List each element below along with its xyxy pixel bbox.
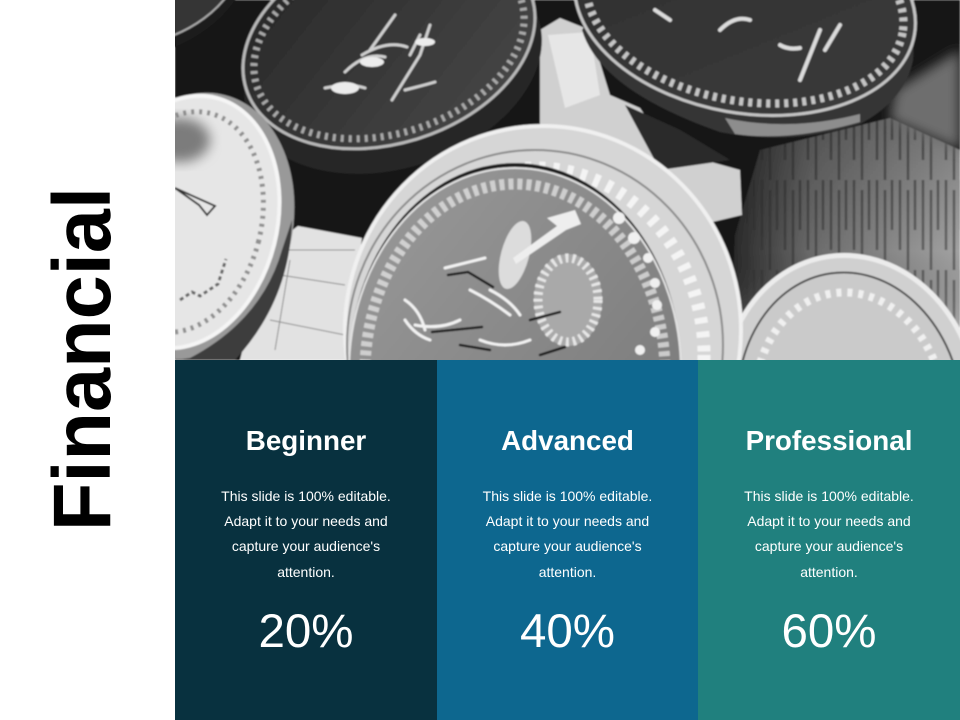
text block: Advanced description: attention. bbox=[539, 564, 596, 580]
text block: Advanced description bbox=[482, 488, 652, 580]
text block: Professional description: Adapt it to your needs and bbox=[747, 513, 911, 529]
heading: Professional: Professional bbox=[746, 425, 912, 456]
panel: Beginner bbox=[175, 360, 437, 720]
stars on main coin bbox=[613, 212, 662, 355]
coin: main centre bbox=[345, 126, 741, 574]
panel: Advanced bbox=[437, 360, 698, 720]
number: 20%: 20% bbox=[258, 605, 354, 658]
coin: upper centre dark bbox=[215, 0, 570, 210]
coin: left bright bbox=[62, 71, 322, 381]
eagle on main coin bbox=[405, 210, 602, 355]
coin: top left bbox=[34, 0, 266, 85]
coin: upper right dark bbox=[557, 0, 933, 141]
photo: black and white coins bbox=[175, 0, 960, 360]
text block: Beginner description bbox=[221, 488, 391, 580]
text block: Advanced description: This slide is 100% editable. bbox=[483, 488, 652, 504]
text block: Beginner description: This slide is 100% editable. bbox=[221, 488, 391, 504]
paper centre bbox=[540, 18, 742, 225]
text block: Professional description: This slide is 100% editable. bbox=[744, 488, 914, 504]
paper lower left bbox=[240, 226, 362, 360]
text block: Beginner description: capture your audience's bbox=[232, 538, 380, 554]
text block: Beginner description: attention. bbox=[277, 564, 335, 580]
text block: Beginner description: Adapt it to your needs and bbox=[224, 513, 388, 529]
text block: Professional description bbox=[744, 488, 914, 580]
heading: Advanced: Advanced bbox=[501, 425, 634, 456]
title: Financial: Financial bbox=[37, 187, 128, 531]
text block: Advanced description: Adapt it to your needs and bbox=[486, 513, 649, 529]
text block: Advanced description: capture your audience's bbox=[493, 538, 642, 554]
heading: Beginner: Beginner bbox=[246, 425, 366, 456]
text block: Professional description: attention. bbox=[800, 564, 858, 580]
map paper right bbox=[730, 50, 960, 360]
panel: Professional bbox=[698, 360, 960, 720]
number: 40%: 40% bbox=[520, 605, 615, 658]
coin: bottom right bright bbox=[702, 239, 960, 571]
background bbox=[175, 0, 960, 360]
text block: Professional description: capture your audience's bbox=[755, 538, 903, 554]
number: 60%: 60% bbox=[781, 605, 877, 658]
